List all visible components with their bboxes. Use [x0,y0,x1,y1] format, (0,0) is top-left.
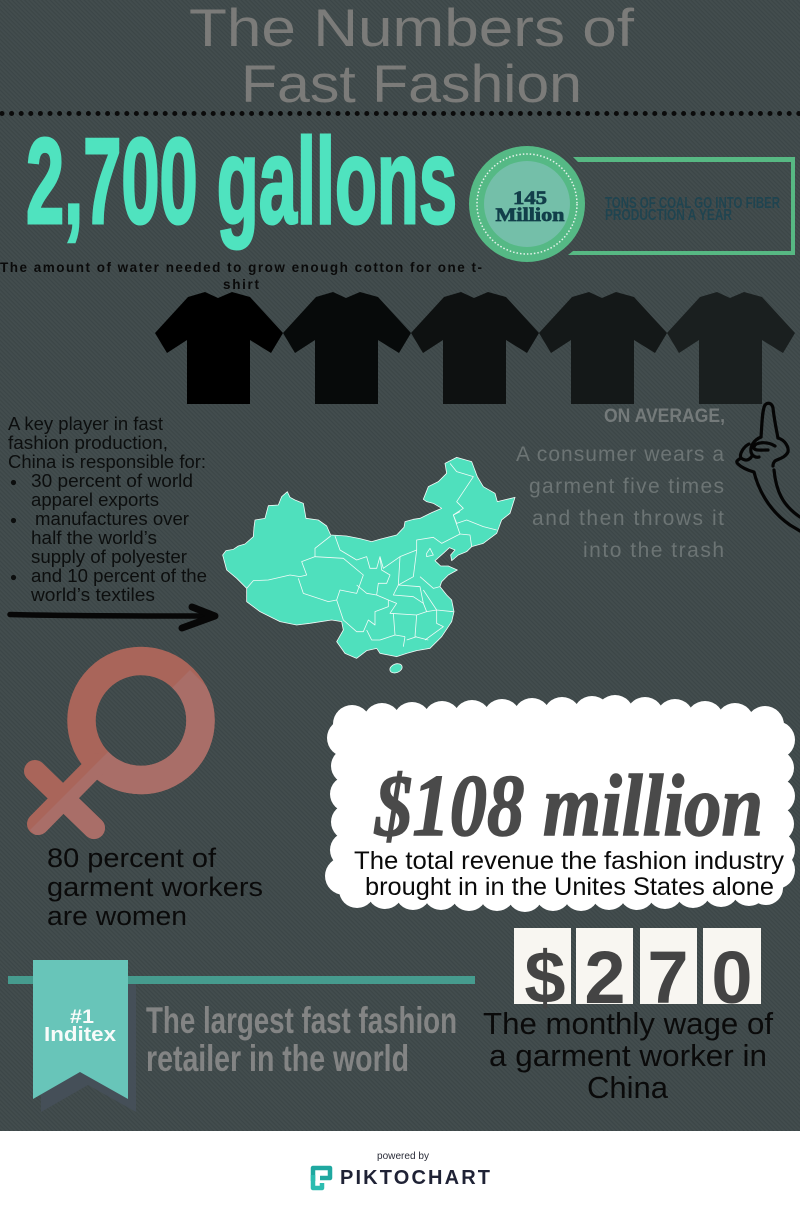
text: total revenue [354,847,785,901]
headline: 2,700 gallons: 2,700 gallons [26,113,457,249]
ribbon: #1 Inditex: Inditex [44,1024,116,1046]
tiles: $270 [514,928,761,1019]
medal: 145 million: 145 [513,188,547,209]
text: monthly wage: a garment worker in [489,1038,767,1073]
text: China key player: manufactures over [35,509,189,529]
text: total revenue: brought in in the Unites States alone [365,873,774,901]
text: on average: garment five times [529,475,724,498]
logo wordmark: PIKTOCHART [340,1167,490,1189]
text: on average [516,406,725,562]
caption: water needed: shirt [223,277,260,292]
tiles: $270: 7 [647,936,689,1019]
icon: pointing hand [737,403,800,531]
text: largest retailer [146,1000,457,1079]
medal: 145 million: Million [496,205,565,226]
icon: female symbol [35,661,200,828]
coal text [605,195,780,224]
text: on average: A consumer wears a [516,443,724,466]
text: largest retailer: retailer in the world [146,1038,409,1079]
caption: water needed [0,260,482,292]
text: on average: ON AVERAGE, [604,406,725,427]
title [189,0,634,114]
powered by: powered by [377,1151,429,1162]
cloud panel [325,695,795,912]
text: garment workers: garment workers [47,872,263,902]
title: The Numbers of [189,0,634,58]
text: China key player [8,414,207,605]
map of China [223,457,515,675]
callout frame: coal [568,157,795,255]
text: China key player: 30 percent of world [31,471,193,491]
text: China key player: and 10 percent of the [31,566,207,586]
tiles: $270: 0 [711,936,753,1019]
text: total revenue: The total revenue the fashion industry [354,847,785,875]
coal text: PRODUCTION A YEAR [605,207,732,224]
footer panel [0,1131,800,1211]
text: China key player: fashion production, [8,433,168,453]
text: China key player: A key player in fast [8,414,163,434]
text: garment workers [47,843,263,931]
text: China key player: China is responsible for: [8,452,206,472]
text: China key player: half the world’s [31,528,157,548]
tiles: $270: 2 [584,936,626,1019]
t-shirts row [155,292,795,404]
text: monthly wage: The monthly wage of [483,1006,773,1041]
text: China key player: apparel exports [31,490,159,510]
medal: 145 million [469,146,585,262]
text: monthly wage: China [587,1070,669,1105]
caption: water needed: The amount of water needed to grow enough cotton for one t- [0,260,482,275]
text: garment workers: are women [47,901,187,931]
logo mark [313,1168,330,1188]
title: Fast Fashion [241,55,582,114]
tiles: $270: $ [524,936,566,1019]
ribbon bar [8,976,475,984]
text: largest retailer: The largest fast fashion [146,1000,457,1041]
text: China key player: supply of polyester [31,547,187,567]
text: on average: and then throws it [532,507,724,530]
text: garment workers: 80 percent of [47,843,217,873]
text: on average: into the trash [583,539,724,562]
arrow [10,607,215,628]
dotted divider [2,111,800,116]
text: monthly wage [483,1006,773,1105]
text: China key player: world’s textiles [30,585,155,605]
ribbon: #1 Inditex: #1 [70,1007,94,1028]
ribbon: #1 Inditex [33,960,136,1112]
